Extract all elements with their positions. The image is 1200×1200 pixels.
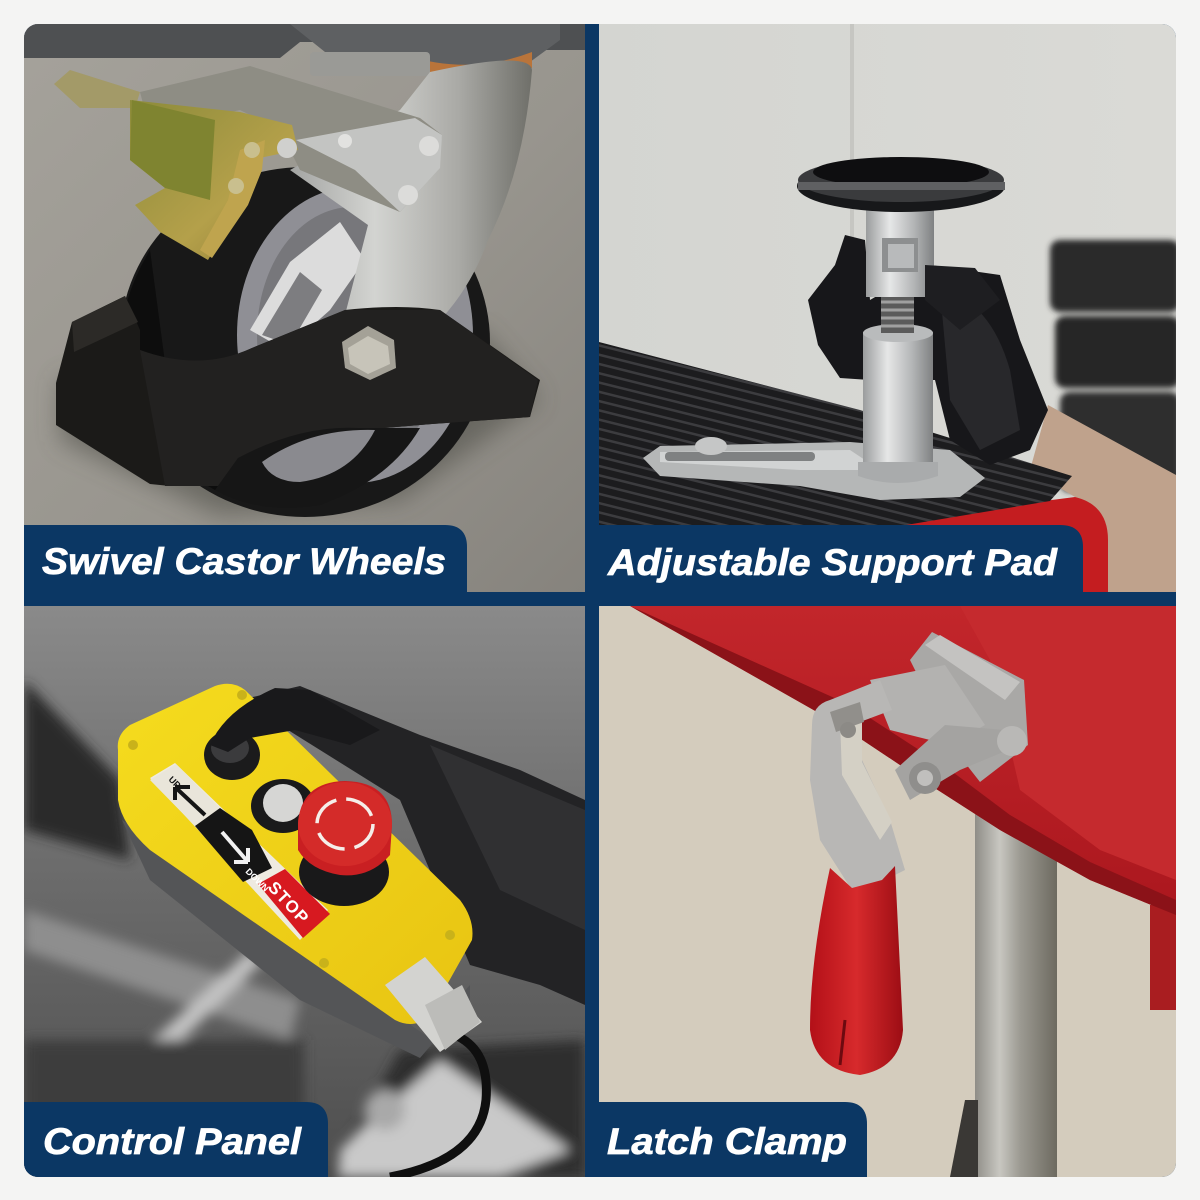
handle arm (810, 680, 905, 895)
black guard (56, 296, 540, 486)
tyre stack (1050, 240, 1180, 492)
down arrow (222, 832, 248, 862)
brake bracket (140, 66, 442, 212)
label: adjustable support pad (585, 525, 1083, 592)
label: control panel (24, 1102, 328, 1177)
label: swivel castor wheels (24, 525, 467, 592)
label: latch clamp: Latch Clamp (607, 1121, 847, 1162)
grey underside (122, 820, 470, 1058)
panel: control panel (24, 606, 585, 1177)
fingers over button (210, 688, 380, 752)
panel: latch clamp (599, 606, 1176, 1177)
glove palm (240, 686, 585, 1005)
brass brake plate (130, 100, 298, 260)
wheel (120, 167, 490, 517)
panel: swivel castor wheels (24, 24, 585, 592)
machine base at top (24, 24, 585, 72)
ground shadow (60, 330, 540, 515)
threaded rod (881, 295, 914, 333)
top disc (797, 182, 1004, 212)
red grip (810, 866, 903, 1075)
glove (808, 235, 1048, 465)
white indicator (251, 779, 315, 833)
forearm (1030, 405, 1176, 592)
clamp mount (910, 632, 1028, 782)
label: latch clamp (585, 1102, 867, 1177)
swivel fork (290, 60, 532, 318)
hex bolt (342, 326, 396, 380)
screws (128, 740, 138, 750)
label strip (150, 763, 328, 940)
cable gland (385, 957, 482, 1052)
panel: adjustable support pad (599, 24, 1180, 592)
red beam (630, 606, 1176, 915)
cable (390, 1035, 486, 1177)
post (975, 810, 1057, 1177)
black ridged table top (599, 342, 1072, 526)
upper post (866, 205, 934, 297)
lower post (863, 332, 933, 470)
base plate (643, 442, 985, 500)
up arrow (175, 787, 205, 815)
label: swivel castor wheels: Swivel Castor Wheels (42, 541, 446, 582)
brake lever (54, 70, 140, 108)
panel: control panel: DOWN (244, 866, 271, 894)
red table leg (906, 497, 1108, 592)
text labels on box: UP (167, 774, 183, 790)
e-stop (299, 857, 389, 906)
yellow housing (118, 684, 472, 1024)
label: control panel: Control Panel (43, 1121, 302, 1162)
label: adjustable support pad: Adjustable Support Pad (607, 542, 1058, 583)
red leg (1150, 905, 1176, 1010)
panel: control panel: STOP (264, 878, 312, 927)
glove thumb (925, 265, 981, 330)
top black button (204, 730, 260, 780)
